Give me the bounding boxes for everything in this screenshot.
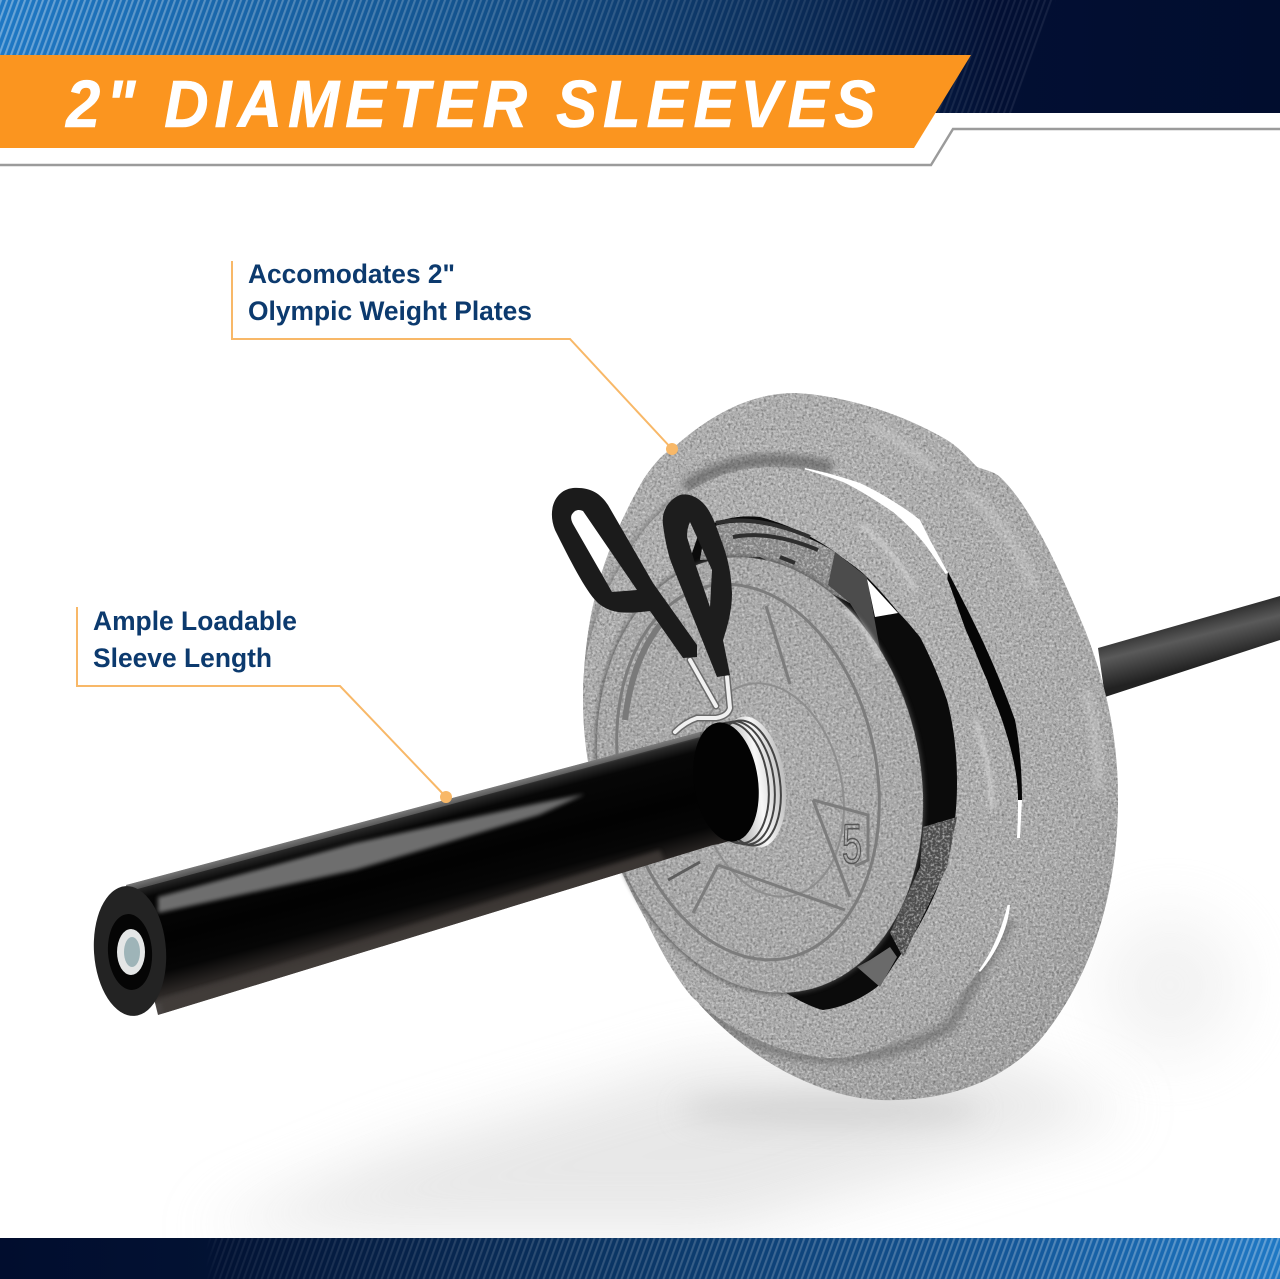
sleeve end bolt — [117, 929, 145, 975]
front plate — [558, 527, 962, 1023]
weight plates — [555, 393, 1118, 1100]
middle plate opening — [620, 516, 957, 1010]
sleeve end recess — [105, 913, 155, 991]
back plate — [583, 393, 1118, 1100]
sleeve body — [126, 731, 752, 1015]
sleeve collar end — [686, 718, 766, 846]
front plate recess and spokes — [583, 560, 913, 984]
back plate highlights — [870, 425, 1098, 790]
callout text: Sleeve Length — [93, 643, 272, 673]
rear bar shaft — [1098, 596, 1280, 697]
leader dot — [666, 443, 678, 455]
spring collar — [552, 488, 794, 852]
inner hub fragment, bottom — [857, 947, 897, 987]
middle plate — [583, 467, 1018, 1058]
bolt hex socket — [124, 937, 140, 967]
callout: plates — [232, 259, 678, 455]
loadable sleeve — [90, 718, 766, 1020]
front plate outline shadow — [555, 524, 965, 1026]
callout text: Olympic Weight Plates — [248, 296, 532, 326]
inner hub ridges — [716, 520, 818, 563]
white gap, upper — [800, 468, 948, 590]
callout text: Ample Loadable — [93, 606, 297, 636]
black gap, right — [945, 572, 1022, 800]
footer band — [0, 1238, 1280, 1279]
callout text: Accomodates 2" — [248, 259, 455, 289]
inner hub wedge — [828, 552, 880, 650]
collar coil grooves — [694, 716, 788, 850]
inner hub detail, upper — [700, 523, 880, 650]
callout text — [248, 259, 532, 326]
right handle — [663, 494, 732, 677]
header white step with grey keyline — [0, 113, 1280, 165]
floor shadow — [200, 915, 1240, 1232]
collar coil body — [710, 712, 794, 852]
title: 2" DIAMETER SLEEVES — [65, 67, 876, 142]
leader dot — [440, 791, 452, 803]
collar wires — [675, 660, 730, 732]
white gap, lower — [972, 905, 1010, 972]
embossed plate number: 5 — [842, 812, 862, 875]
leader line — [77, 607, 446, 797]
leader line — [232, 261, 672, 449]
white window — [867, 579, 898, 617]
title banner — [0, 55, 971, 148]
front plate highlight — [845, 610, 880, 660]
sleeve highlights — [126, 732, 700, 1020]
header band — [0, 0, 1280, 113]
white gap, right edge — [1012, 800, 1022, 838]
middle plate highlights — [860, 525, 992, 810]
inner hub detail, lower — [890, 817, 957, 957]
callout: sleeve length — [77, 606, 452, 803]
callout text — [93, 606, 297, 673]
sleeve end face — [90, 884, 170, 1018]
plate contact shadows — [583, 460, 1010, 1058]
left handle — [552, 488, 697, 658]
